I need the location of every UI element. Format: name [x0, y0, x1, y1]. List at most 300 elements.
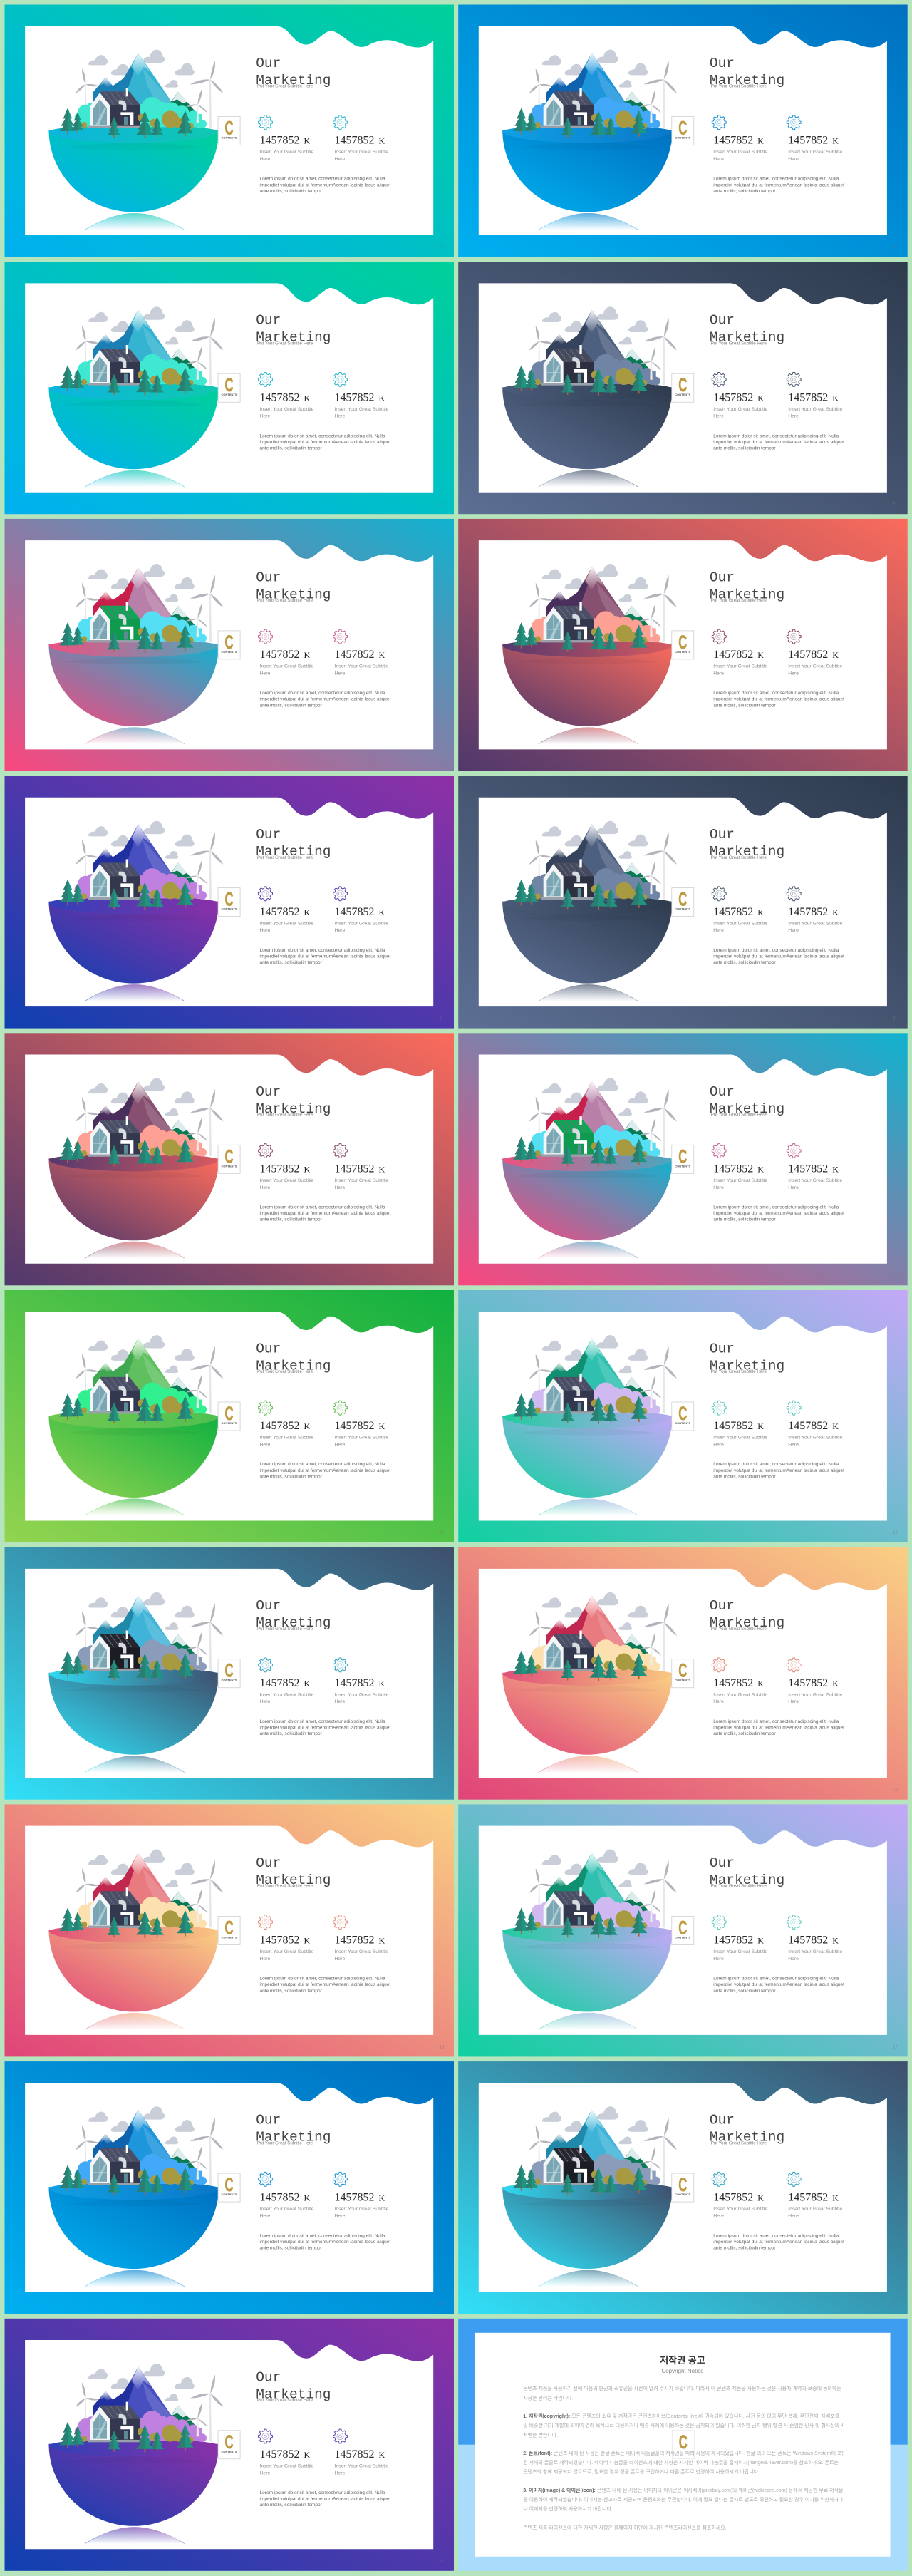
stat caption left: Insert Your Great Subtitle: [259, 921, 314, 926]
brand logo card: CONTENTS: [221, 393, 237, 396]
background lower light blue band: [458, 2445, 908, 2571]
stat left: 1457852 K: [259, 1163, 311, 1175]
stat caption right: Here: [335, 671, 345, 676]
icon: gear left: [712, 887, 726, 901]
subheading: Put Your Great Subtitle Here: [711, 2140, 767, 2145]
body paragraph: imperdiet volutpat dui at fermentumAenean lacinia lacus aliquet: [713, 954, 844, 959]
stat caption right: Here: [335, 414, 345, 419]
subheading: Put Your Great Subtitle Here: [257, 855, 314, 860]
body paragraph: ante mollis, sollicitudin tempor: [713, 1989, 776, 1994]
stat caption right: Here: [788, 1957, 799, 1962]
icon: gear right: [333, 1658, 347, 1672]
stat caption left: Here: [259, 414, 270, 419]
body paragraph: imperdiet volutpat dui at fermentumAenean lacinia lacus aliquet: [259, 954, 390, 959]
slide 5: slate gradient: [458, 262, 908, 514]
stat caption left: Insert Your Great Subtitle: [259, 2464, 314, 2469]
stat caption left: Insert Your Great Subtitle: [713, 1949, 767, 1954]
heading: Our: [710, 1084, 735, 1100]
white panel with wavy edge: [479, 283, 887, 493]
white panel with wavy edge: [25, 2083, 433, 2292]
stat caption left: Insert Your Great Subtitle: [713, 664, 767, 669]
body paragraph: imperdiet volutpat dui at fermentumAenean lacinia lacus aliquet: [713, 1468, 844, 1473]
stat caption left: Insert Your Great Subtitle: [713, 150, 767, 155]
stat left: 1457852 K: [259, 391, 311, 403]
white panel with wavy edge: [479, 1826, 887, 2035]
page number: 17: [893, 2045, 898, 2049]
body paragraph: Lorem ipsum dolor sit amet, consectetur adipiscing elit. Nulla: [713, 2233, 839, 2238]
brand logo card: CONTENTS: [675, 1164, 691, 1168]
body paragraph: imperdiet volutpat dui at fermentumAenean lacinia lacus aliquet: [259, 697, 390, 702]
stat caption right: Insert Your Great Subtitle: [788, 150, 842, 155]
brand logo card: C: [678, 1145, 687, 1167]
brand logo card: [672, 117, 694, 145]
icon: gear left: [259, 115, 272, 130]
heading: Our: [256, 56, 281, 71]
notice body text: 콘텐츠의 함께 제공되지 않으므로, 필요한 경우 정품 폰트를 구입하거나 다른 폰트로 변경하여 사용하시기 바랍니다.: [523, 2468, 760, 2475]
body paragraph: imperdiet volutpat dui at fermentumAenean lacinia lacus aliquet: [259, 182, 390, 187]
stat right: 1457852 K: [788, 1677, 839, 1689]
body paragraph: Lorem ipsum dolor sit amet, consectetur adipiscing elit. Nulla: [713, 433, 839, 438]
slide 8: indigo to violet gradient: [4, 776, 454, 1029]
stat caption right: Insert Your Great Subtitle: [335, 1436, 389, 1441]
stat caption left: Insert Your Great Subtitle: [259, 2207, 314, 2212]
page number: 3: [893, 245, 896, 249]
icon: gear left: [712, 2172, 726, 2186]
brand logo card: C: [678, 632, 687, 653]
stat left: 1457852 K: [259, 2191, 311, 2203]
illustration: house, mountains, trees and wind turbines: [513, 306, 677, 396]
icon: gear right: [333, 1915, 347, 1929]
illustration: house, mountains, trees and wind turbines: [59, 1335, 223, 1423]
brand logo card: C: [225, 2174, 234, 2195]
slide background gradient: [4, 1804, 454, 2056]
brand logo card: CONTENTS: [221, 650, 237, 654]
brand logo card: CONTENTS: [221, 1164, 237, 1168]
stat right: 1457852 K: [788, 1420, 839, 1432]
body paragraph: Lorem ipsum dolor sit amet, consectetur adipiscing elit. Nulla: [713, 1719, 839, 1724]
stat caption left: Insert Your Great Subtitle: [259, 407, 314, 412]
stat caption left: Here: [259, 1957, 270, 1962]
stat caption right: Here: [335, 928, 345, 933]
brand logo card: [218, 888, 240, 917]
brand logo card: [672, 373, 694, 402]
stat caption right: Insert Your Great Subtitle: [335, 664, 389, 669]
brand logo card: [672, 1916, 694, 1944]
slide background gradient: [458, 1804, 908, 2056]
brand logo card: CONTENTS: [221, 1421, 237, 1425]
heading: Our: [256, 313, 281, 329]
icon: gear left: [259, 887, 272, 901]
heading: Marketing: [256, 1872, 331, 1888]
stat caption left: Insert Your Great Subtitle: [259, 150, 314, 155]
body paragraph: Lorem ipsum dolor sit amet, consectetur adipiscing elit. Nulla: [713, 691, 839, 696]
subheading: Put Your Great Subtitle Here: [711, 84, 767, 89]
stat caption left: Insert Your Great Subtitle: [713, 1178, 767, 1183]
stat caption right: Insert Your Great Subtitle: [788, 1949, 842, 1954]
illustration: house, mountains, trees and wind turbines: [59, 1850, 223, 1938]
page number: 8: [439, 1017, 442, 1021]
page number: 16: [439, 2045, 445, 2049]
subheading: Put Your Great Subtitle Here: [257, 341, 314, 346]
brand logo card: C: [225, 117, 234, 138]
heading: Our: [710, 56, 735, 71]
heading: Our: [710, 313, 735, 329]
stat caption right: Insert Your Great Subtitle: [788, 1178, 842, 1183]
bowl island base: [48, 1667, 219, 1773]
heading: Marketing: [710, 1101, 784, 1117]
illustration: house, mountains, trees and wind turbines: [59, 2364, 223, 2452]
illustration: house, mountains, trees and wind turbines: [59, 821, 223, 910]
bowl island base: [48, 1153, 219, 1259]
heading: Marketing: [710, 1615, 784, 1631]
slide background gradient: [4, 1033, 454, 1285]
white panel with wavy edge: [25, 1055, 433, 1264]
brand logo card: C: [678, 1660, 687, 1681]
subheading: Put Your Great Subtitle Here: [711, 1113, 767, 1118]
notice body text: 3. 이미지(image) & 아이콘(icon): 콘텐츠 내에 된 사용는 이미지와 아이콘은 픽사베이(pixabay.com)와 웨비콘(webicons.com) 등에서 제공한 무료 저작물: [523, 2487, 844, 2493]
page number: 14: [439, 1788, 445, 1793]
white notice panel: [475, 2333, 891, 2557]
slide 15: pink to yellow gradient: [458, 1547, 908, 1800]
heading: Our: [256, 1341, 281, 1357]
page number: 9: [893, 1017, 896, 1021]
brand logo card: C: [225, 1145, 234, 1167]
stat caption right: Here: [335, 1699, 345, 1704]
slide background gradient: [458, 776, 908, 1029]
brand logo card: [218, 373, 240, 402]
slide background gradient: [4, 1290, 454, 1542]
stat caption right: Here: [788, 2214, 799, 2219]
heading: Our: [710, 570, 735, 585]
stat left: 1457852 K: [713, 391, 764, 403]
body paragraph: ante mollis, sollicitudin tempor: [713, 960, 776, 965]
white panel with wavy edge: [479, 798, 887, 1006]
heading: Marketing: [256, 844, 331, 860]
bowl island base: [48, 1411, 219, 1515]
white panel with wavy edge: [25, 26, 433, 235]
stat caption left: Here: [713, 414, 724, 419]
subheading: Put Your Great Subtitle Here: [711, 341, 767, 346]
stat caption right: Insert Your Great Subtitle: [788, 1436, 842, 1441]
white panel with wavy edge: [25, 1826, 433, 2035]
brand logo card: CONTENTS: [221, 1679, 237, 1682]
stat caption right: Insert Your Great Subtitle: [335, 1949, 389, 1954]
notice body text: [523, 2385, 861, 2530]
slide 9: slate gradient: [458, 776, 908, 1029]
bowl island base: [502, 2182, 673, 2287]
subheading: Put Your Great Subtitle Here: [257, 84, 314, 89]
brand logo card: [672, 1659, 694, 1688]
brand logo card: [672, 1145, 694, 1173]
brand logo card: [218, 2431, 240, 2459]
stat left: 1457852 K: [713, 906, 764, 918]
stat caption right: Insert Your Great Subtitle: [788, 407, 842, 412]
brand logo card: CONTENTS: [221, 135, 237, 140]
stat right: 1457852 K: [335, 2448, 385, 2461]
stat caption left: Insert Your Great Subtitle: [713, 2207, 767, 2212]
stat caption right: Insert Your Great Subtitle: [335, 921, 389, 926]
slide: copyright notice: [458, 2319, 908, 2571]
icon: gear left: [712, 372, 726, 386]
stat caption left: Here: [713, 157, 724, 162]
brand logo card: CONTENTS: [675, 135, 691, 140]
stat right: 1457852 K: [788, 1163, 839, 1175]
brand logo card: C: [678, 117, 687, 138]
icon: gear left: [259, 629, 272, 644]
icon: gear right: [787, 1915, 801, 1929]
stat caption right: Here: [335, 157, 345, 162]
stat caption left: Here: [713, 1957, 724, 1962]
page number: 7: [893, 760, 896, 764]
body paragraph: imperdiet volutpat dui at fermentumAenean lacinia lacus aliquet: [713, 2240, 844, 2245]
icon: gear right: [787, 1401, 801, 1415]
heading: Marketing: [256, 1615, 331, 1631]
brand logo card: [218, 1402, 240, 1431]
page number: 10: [439, 1274, 445, 1278]
heading: Our: [256, 2113, 281, 2128]
body paragraph: ante mollis, sollicitudin tempor: [259, 2503, 323, 2508]
body paragraph: ante mollis, sollicitudin tempor: [259, 1474, 323, 1479]
brand logo watermark: C: [679, 2431, 688, 2453]
body paragraph: ante mollis, sollicitudin tempor: [713, 703, 776, 708]
subheading: Put Your Great Subtitle Here: [257, 2398, 314, 2403]
illustration: house, mountains, trees and wind turbines: [513, 564, 677, 652]
icon: gear right: [787, 372, 801, 386]
brand logo card: CONTENTS: [221, 2193, 237, 2196]
body paragraph: ante mollis, sollicitudin tempor: [259, 1217, 323, 1222]
stat caption left: Here: [259, 157, 270, 162]
subheading: Put Your Great Subtitle Here: [257, 1884, 314, 1889]
bowl island base: [502, 1153, 673, 1259]
white panel with wavy edge: [25, 283, 433, 493]
illustration: house, mountains, trees and wind turbines: [513, 1335, 677, 1423]
stat caption right: Here: [788, 1699, 799, 1704]
slide 12: green gradient: [4, 1290, 454, 1542]
bowl island base: [48, 125, 219, 230]
heading: Our: [710, 2113, 735, 2128]
stat left: 1457852 K: [713, 1163, 764, 1175]
heading: Our: [256, 2369, 281, 2385]
notice body text: 콘텐츠 제품 라이선스에 대한 자세한 사항은 홈페이지 하단에 게시된 콘텐츠라이선스를 참조하세요.: [523, 2525, 727, 2531]
body paragraph: Lorem ipsum dolor sit amet, consectetur adipiscing elit. Nulla: [259, 2233, 385, 2238]
body paragraph: imperdiet volutpat dui at fermentumAenean lacinia lacus aliquet: [713, 1982, 844, 1987]
icon: gear right: [333, 115, 347, 130]
body paragraph: ante mollis, sollicitudin tempor: [259, 2246, 323, 2251]
brand logo card: [672, 2173, 694, 2202]
stat caption left: Here: [713, 2214, 724, 2219]
stat right: 1457852 K: [335, 1677, 385, 1689]
body paragraph: Lorem ipsum dolor sit amet, consectetur adipiscing elit. Nulla: [259, 1205, 385, 1210]
heading: Our: [256, 827, 281, 843]
stat caption left: Here: [713, 1185, 724, 1190]
notice subtitle: Copyright Notice: [661, 2368, 704, 2374]
white panel with wavy edge: [479, 540, 887, 749]
body paragraph: Lorem ipsum dolor sit amet, consectetur adipiscing elit. Nulla: [259, 1977, 385, 1982]
notice body text: 콘텐츠 제품을 사용하기 전에 다음의 판권과 소유권을 사전에 알려 주시기 바랍니다. 따라서 이 콘텐츠 제품을 사용하는 것은 사용자 계약과 보증에 동의하는 것입니다: [523, 2385, 861, 2391]
body paragraph: ante mollis, sollicitudin tempor: [713, 1731, 776, 1736]
body paragraph: Lorem ipsum dolor sit amet, consectetur adipiscing elit. Nulla: [259, 948, 385, 953]
icon: gear right: [333, 1144, 347, 1158]
stat right: 1457852 K: [335, 906, 385, 918]
page number: 5: [893, 503, 896, 507]
white panel with wavy edge: [479, 1055, 887, 1264]
body paragraph: Lorem ipsum dolor sit amet, consectetur adipiscing elit. Nulla: [259, 1462, 385, 1467]
body paragraph: ante mollis, sollicitudin tempor: [713, 189, 776, 194]
brand logo card: [218, 1916, 240, 1944]
icon: gear right: [333, 372, 347, 386]
subheading: Put Your Great Subtitle Here: [257, 598, 314, 603]
brand logo card: [218, 117, 240, 145]
body paragraph: ante mollis, sollicitudin tempor: [713, 446, 776, 451]
body paragraph: ante mollis, sollicitudin tempor: [259, 189, 323, 194]
body paragraph: imperdiet volutpat dui at fermentumAenean lacinia lacus aliquet: [259, 2497, 390, 2502]
slide 13: mint to lilac gradient: [458, 1290, 908, 1542]
body paragraph: Lorem ipsum dolor sit amet, consectetur adipiscing elit. Nulla: [259, 691, 385, 696]
slide 4: teal gradient: [4, 262, 454, 514]
bowl island base: [48, 896, 219, 1001]
white panel with wavy edge: [479, 2083, 887, 2292]
slide background gradient: [458, 262, 908, 514]
stat left: 1457852 K: [713, 135, 764, 147]
icon: gear left: [259, 1144, 272, 1158]
slide background gradient: [4, 776, 454, 1029]
stat caption left: Insert Your Great Subtitle: [259, 1692, 314, 1697]
stat caption right: Here: [335, 1185, 345, 1190]
body paragraph: imperdiet volutpat dui at fermentumAenean lacinia lacus aliquet: [713, 697, 844, 702]
body paragraph: Lorem ipsum dolor sit amet, consectetur adipiscing elit. Nulla: [259, 177, 385, 182]
slide background gradient: [4, 2319, 454, 2571]
stat right: 1457852 K: [788, 2191, 839, 2203]
body paragraph: ante mollis, sollicitudin tempor: [713, 1474, 776, 1479]
icon: gear left: [712, 1658, 726, 1672]
stat caption left: Insert Your Great Subtitle: [259, 1949, 314, 1954]
stat caption right: Here: [788, 414, 799, 419]
body paragraph: imperdiet volutpat dui at fermentumAenean lacinia lacus aliquet: [259, 1725, 390, 1730]
subheading: Put Your Great Subtitle Here: [711, 855, 767, 860]
subheading: Put Your Great Subtitle Here: [257, 2140, 314, 2145]
stat right: 1457852 K: [335, 1420, 385, 1432]
brand logo card: CONTENTS: [675, 2193, 691, 2196]
slide 2: teal gradient: [4, 4, 454, 257]
white panel with wavy edge: [25, 1569, 433, 1778]
brand logo card: CONTENTS: [675, 393, 691, 396]
stat caption right: Insert Your Great Subtitle: [335, 2207, 389, 2212]
illustration: house, mountains, trees and wind turbines: [513, 2106, 677, 2195]
stat right: 1457852 K: [788, 391, 839, 403]
stat caption left: Here: [713, 928, 724, 933]
stat caption left: Here: [259, 671, 270, 676]
stat caption left: Here: [259, 1443, 270, 1447]
brand logo card: [218, 1659, 240, 1688]
icon: gear right: [333, 2172, 347, 2186]
notice body text: 사용을 알리는 바입니다.: [523, 2395, 573, 2401]
brand logo card: [218, 1145, 240, 1173]
stat left: 1457852 K: [259, 1677, 311, 1689]
white panel with wavy edge: [479, 26, 887, 235]
notice body text: 및 비슷한 기기 개발에 의하여 영리 목적으로 이용하거나 배경 사례에 이용하는 것은 금지되어 있습니다. 이러한 금지 행위 발견 시 준엄한 민사 및 형사상의 사법: [523, 2422, 850, 2428]
page number: 12: [439, 1531, 445, 1535]
bowl island base: [502, 382, 673, 488]
bowl island base: [502, 1667, 673, 1773]
slide 10: purple to coral gradient: [4, 1033, 454, 1285]
notice title: 저작권 공고: [660, 2355, 705, 2366]
heading: Our: [710, 1855, 735, 1871]
brand logo watermark: [672, 2431, 694, 2459]
heading: Marketing: [710, 2130, 784, 2145]
brand logo card: [218, 631, 240, 659]
subheading: Put Your Great Subtitle Here: [257, 1113, 314, 1118]
icon: gear left: [712, 1144, 726, 1158]
stat right: 1457852 K: [335, 391, 385, 403]
brand logo card: CONTENTS: [221, 1935, 237, 1939]
white panel with wavy edge: [25, 540, 433, 749]
white panel with wavy edge: [25, 1312, 433, 1521]
illustration: house, mountains, trees and wind turbines: [513, 821, 677, 910]
bowl island base: [48, 382, 219, 488]
icon: gear right: [787, 629, 801, 644]
slide 7: purple to coral gradient: [458, 519, 908, 771]
slide 17: mint to lilac gradient: [458, 1804, 908, 2056]
stat left: 1457852 K: [259, 649, 311, 661]
subheading: Put Your Great Subtitle Here: [257, 1627, 314, 1632]
body paragraph: imperdiet volutpat dui at fermentumAenean lacinia lacus aliquet: [259, 440, 390, 445]
stat left: 1457852 K: [259, 1420, 311, 1432]
stat right: 1457852 K: [335, 1934, 385, 1947]
stat caption left: Insert Your Great Subtitle: [713, 1436, 767, 1441]
stat caption left: Here: [713, 1443, 724, 1447]
brand logo card: C: [678, 2174, 687, 2195]
stat caption right: Here: [788, 671, 799, 676]
icon: gear left: [259, 2429, 272, 2443]
icon: gear left: [712, 1401, 726, 1415]
brand logo card: C: [225, 1917, 234, 1938]
stat caption right: Here: [335, 1443, 345, 1447]
slide 18: blue gradient: [4, 2061, 454, 2314]
page number: 6: [439, 760, 442, 764]
body paragraph: Lorem ipsum dolor sit amet, consectetur adipiscing elit. Nulla: [713, 948, 839, 953]
illustration: house, mountains, trees and wind turbines: [513, 50, 677, 138]
illustration: house, mountains, trees and wind turbines: [59, 2106, 223, 2195]
heading: Our: [256, 1084, 281, 1100]
brand logo card: C: [225, 889, 234, 910]
page number: 2: [439, 245, 442, 249]
icon: gear left: [259, 2172, 272, 2186]
bowl island base: [502, 1925, 673, 2030]
body paragraph: imperdiet volutpat dui at fermentumAenean lacinia lacus aliquet: [713, 182, 844, 187]
stat caption left: Insert Your Great Subtitle: [259, 1178, 314, 1183]
heading: Our: [710, 1598, 735, 1614]
icon: gear right: [333, 2429, 347, 2443]
icon: gear left: [259, 1658, 272, 1672]
brand logo card: CONTENTS: [221, 907, 237, 911]
slide background gradient: [458, 4, 908, 257]
white panel with wavy edge: [25, 2340, 433, 2549]
illustration: house, mountains, trees and wind turbines: [59, 1592, 223, 1681]
brand logo card: CONTENTS: [675, 1679, 691, 1682]
page number: 13: [893, 1531, 898, 1535]
stat caption right: Here: [788, 157, 799, 162]
body paragraph: ante mollis, sollicitudin tempor: [259, 703, 323, 708]
heading: Marketing: [710, 587, 784, 602]
icon: gear right: [787, 2172, 801, 2186]
notice body text: 1. 저작권(copyright): 모든 콘텐츠의 소유 및 저작권은 콘텐츠하이브(ContentsHive)에 귀속되어 있습니다. 사전 동의 없이 무단 복제, 무단전재, 재배포를: [523, 2413, 840, 2419]
body paragraph: ante mollis, sollicitudin tempor: [259, 1989, 323, 1994]
stat right: 1457852 K: [788, 906, 839, 918]
body paragraph: Lorem ipsum dolor sit amet, consectetur adipiscing elit. Nulla: [259, 2490, 385, 2495]
stat right: 1457852 K: [788, 649, 839, 661]
body paragraph: ante mollis, sollicitudin tempor: [259, 446, 323, 451]
brand logo card: C: [678, 1917, 687, 1938]
